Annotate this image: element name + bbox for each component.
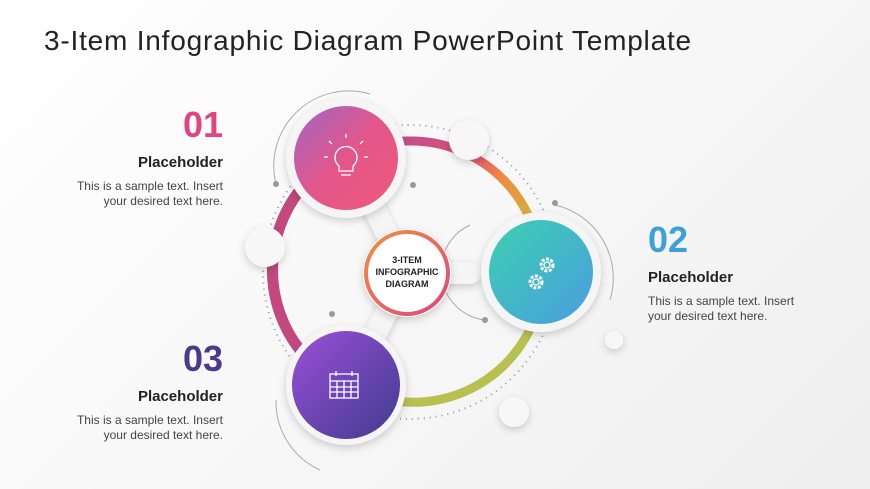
item 3 circle: calendar — [286, 325, 406, 445]
dotted outer circle — [263, 125, 557, 419]
title: 3-Item Infographic Diagram PowerPoint Template — [44, 25, 692, 56]
item 03 text — [77, 338, 223, 442]
item 01 text: Placeholder — [138, 154, 223, 171]
center circle: 3-ITEM — [392, 255, 422, 265]
gradient ring — [272, 141, 536, 402]
item 2 circle: gears — [481, 212, 601, 332]
item 02 text — [648, 219, 794, 323]
decorative bubbles — [245, 120, 623, 427]
item 03 text: This is a sample text. Insert — [77, 413, 223, 427]
item 02 text: This is a sample text. Insert — [648, 294, 794, 308]
item 02 text: Placeholder — [648, 269, 733, 286]
item 03 text: 03 — [183, 338, 223, 379]
item 02 text: your desired text here. — [648, 309, 767, 323]
center circle: DIAGRAM — [386, 279, 428, 289]
item 01 text — [77, 104, 223, 208]
item 01 text: 01 — [183, 104, 223, 145]
item 1 circle: lightbulb — [286, 98, 406, 218]
thin arcs — [274, 91, 613, 470]
item 03 text: your desired text here. — [104, 428, 223, 442]
item 03 text: Placeholder — [138, 388, 223, 405]
center circle: INFOGRAPHIC — [376, 267, 439, 277]
item 01 text: your desired text here. — [104, 194, 223, 208]
bridges between center and items — [370, 200, 470, 345]
center circle — [363, 229, 451, 317]
item 01 text: This is a sample text. Insert — [77, 179, 223, 193]
item 02 text: 02 — [648, 219, 688, 260]
